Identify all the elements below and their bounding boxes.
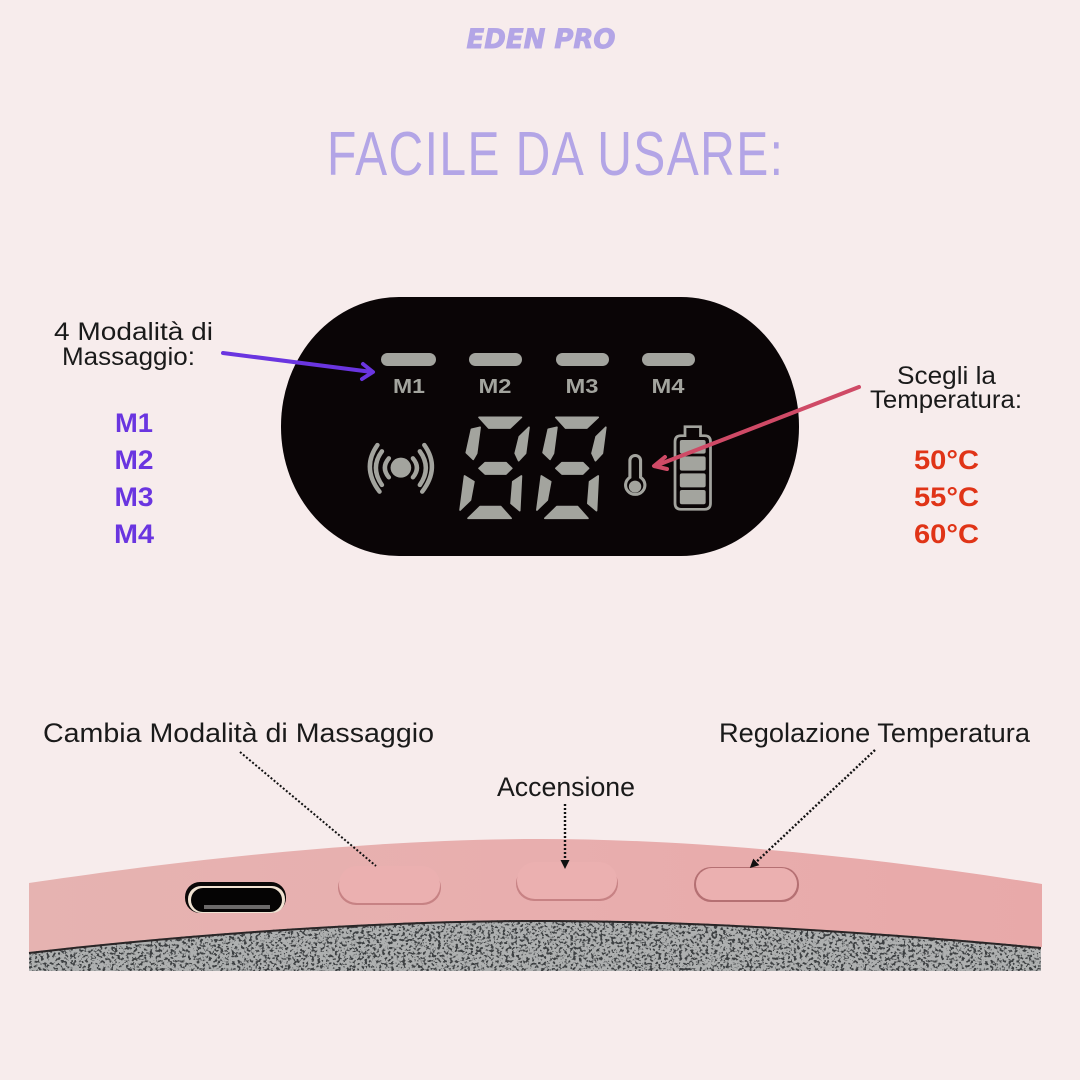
arrow: temperature: [654, 387, 859, 469]
icon: thermometer: [626, 455, 645, 494]
list: massage modes: M2: [114, 445, 154, 475]
mode labels on display: M4: [652, 376, 686, 398]
text: temperature heading: Temperatura:: [870, 386, 1022, 414]
button: temperature: [694, 867, 799, 902]
dotted arrow: power button: [564, 804, 566, 866]
device strap: [29, 839, 1042, 971]
mode labels on display: M1: [393, 376, 425, 398]
text: modes heading: [54, 318, 213, 371]
mode labels on display: [393, 376, 686, 398]
list: temperatures: 55°C: [914, 482, 979, 512]
pink band: [29, 839, 1042, 952]
text: temperature heading: [870, 362, 1022, 414]
dark seam: [29, 921, 1041, 953]
button: mode: [338, 866, 441, 905]
button: power: [516, 862, 618, 901]
mode indicators M1-M4: [381, 353, 695, 366]
list: massage modes: M4: [114, 519, 154, 549]
icon: vibration: [370, 445, 432, 492]
text: modes heading: 4 Modalità di: [54, 318, 213, 346]
list: temperatures: 60°C: [914, 519, 979, 549]
arrow: modes: [223, 353, 373, 379]
mode labels on display: M3: [566, 376, 598, 398]
dotted arrow: temperature button: [752, 750, 875, 866]
icon: battery: [675, 427, 710, 509]
label: change massage mode: Cambia Modalità di Massaggio: [43, 718, 434, 748]
brand logo: Eden Pro: EDEN PRO: [466, 24, 616, 55]
label: power: Accensione: [497, 772, 635, 802]
label: temperature regulation: Regolazione Temperatura: [719, 718, 1031, 748]
USB-C port: [185, 882, 286, 913]
list: massage modes: M1: [115, 408, 153, 438]
list: massage modes: M3: [114, 482, 154, 512]
list: temperatures: [914, 445, 979, 549]
mode labels on display: M2: [478, 376, 512, 398]
fabric: [29, 918, 1041, 971]
panel: LCD display: [281, 297, 799, 556]
dotted arrow: mode button: [240, 752, 376, 866]
text: modes heading: Massaggio:: [62, 343, 195, 371]
list: massage modes: [114, 408, 154, 549]
seven-segment digits: [460, 417, 606, 518]
title: FACILE DA USARE:: [327, 119, 783, 188]
text: temperature heading: Scegli la: [897, 362, 996, 390]
list: temperatures: 50°C: [914, 445, 979, 475]
